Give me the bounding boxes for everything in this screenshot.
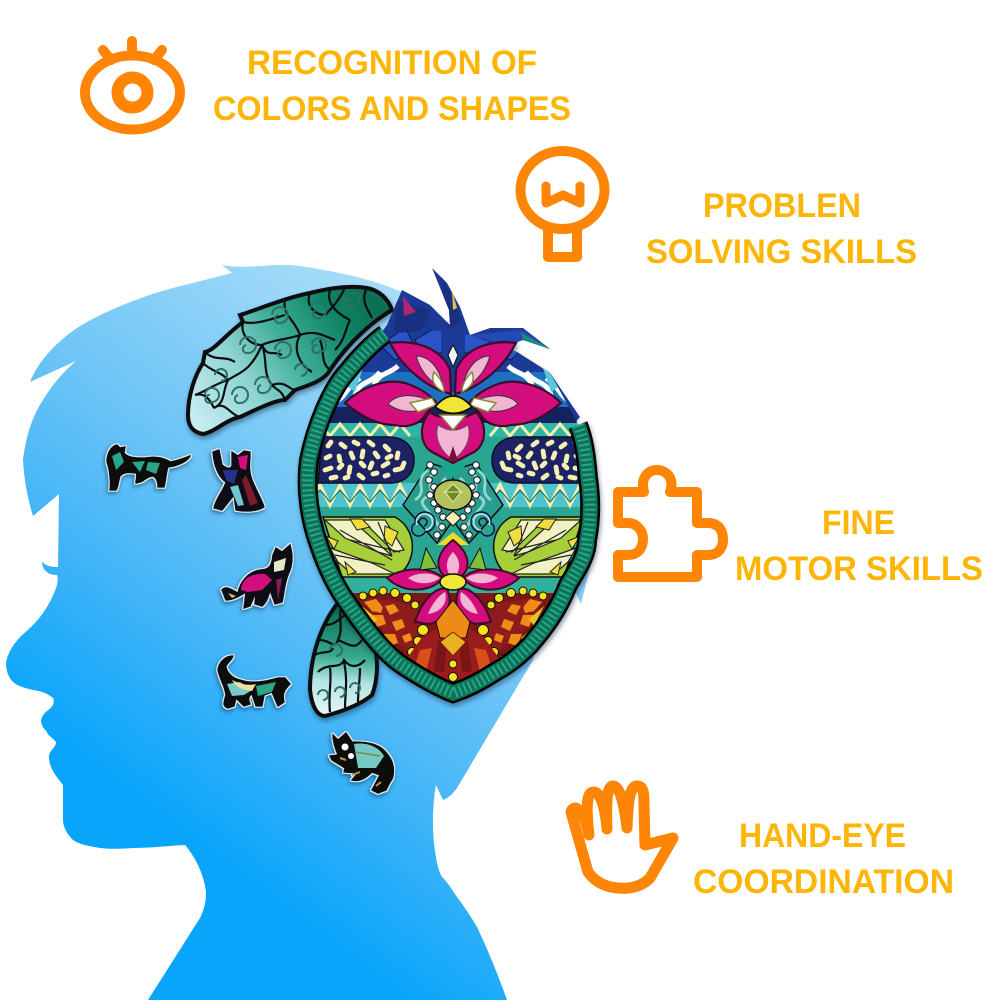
icon: puzzle piece [618, 470, 723, 577]
label: problen solving skills [646, 187, 917, 271]
cat puzzle piece 3 [222, 545, 292, 608]
boy head silhouette [6, 265, 592, 1000]
small flower [438, 540, 468, 590]
shell pattern bands [318, 330, 580, 682]
label: hand-eye coordination: COORDINATION [693, 863, 954, 901]
turtle head (clipped top) [382, 268, 580, 422]
cat puzzle piece 1 [107, 445, 190, 490]
label: hand-eye coordination [693, 817, 954, 901]
icon: light bulb [520, 151, 604, 257]
label: recognition of colors and shapes [213, 44, 571, 128]
left half pattern [318, 325, 453, 686]
upper front flipper [188, 287, 392, 434]
turtle puzzle [188, 260, 600, 716]
label: problen solving skills: SOLVING SKILLS [646, 233, 917, 271]
cat puzzle piece 2 [213, 450, 264, 511]
big flower outer petals, right [455, 342, 561, 426]
cat puzzle piece 5 [330, 733, 394, 793]
label: fine motor skills [735, 504, 983, 588]
turtle shell [300, 325, 600, 703]
label: hand-eye coordination: HAND-EYE [739, 817, 906, 855]
shell striped rim [308, 334, 590, 693]
cat puzzle piece 4 [218, 656, 290, 708]
right half pattern (mirrored) [453, 325, 588, 686]
label: problen solving skills: PROBLEN [703, 187, 861, 225]
icon: hand [571, 786, 673, 888]
icon: eye [85, 41, 180, 130]
label: fine motor skills: FINE [822, 504, 895, 542]
big flower outer petals, left [345, 342, 451, 426]
label: fine motor skills: MOTOR SKILLS [735, 550, 983, 588]
big flower [422, 396, 484, 463]
label: recognition of colors and shapes: COLORS AND SHAPES [213, 90, 571, 128]
label: recognition of colors and shapes: RECOGNITION OF [247, 44, 537, 82]
lower front flipper [310, 595, 377, 716]
